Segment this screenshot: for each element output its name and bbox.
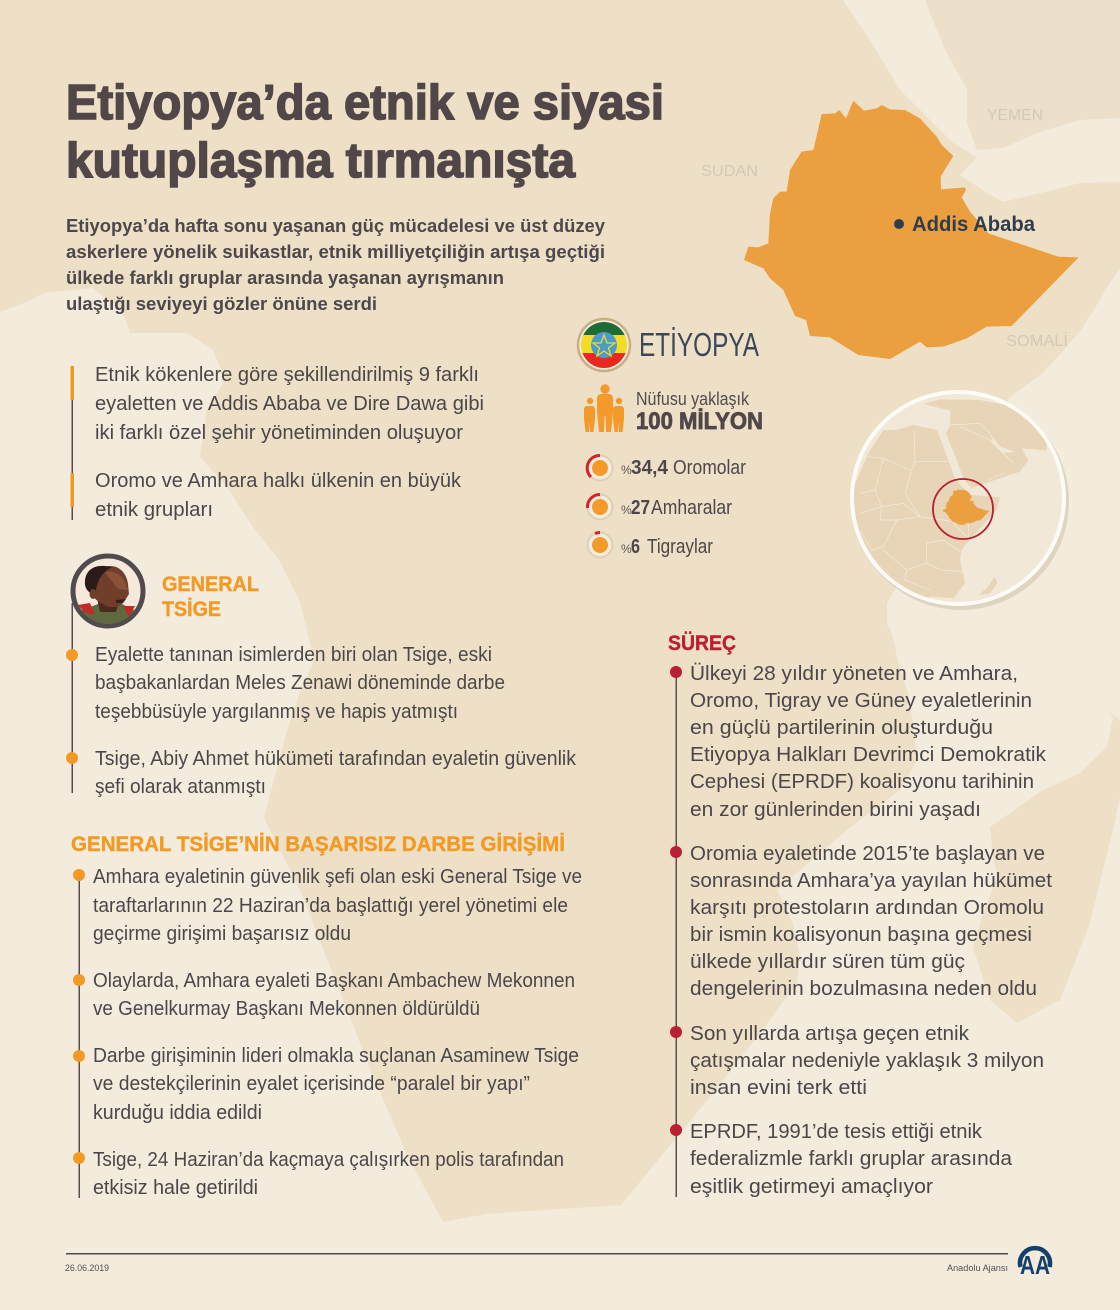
intro text: Etiyopya’da hafta sonu yaşanan güç mücadelesi ve üst düzey [66, 216, 605, 236]
panel: failed coup: GENERAL TSİGE’NİN BAŞARISIZ DARBE GİRİŞİMİ [71, 833, 565, 856]
text block: displacement: insan evini terk etti [690, 1077, 867, 1099]
text block: administrative structure: eyaletten ve Addis Ababa ve Dire Dawa gibi [95, 393, 484, 415]
country labels: SUDAN [701, 163, 758, 180]
text block: appointment: Tsige, Abiy Ahmet hükümeti tarafından eyaletin güvenlik [95, 748, 577, 770]
text block: neutralized [73, 1149, 564, 1199]
text block: largest groups [95, 470, 462, 521]
title [66, 76, 664, 188]
population: Nüfusu yaklaşık [636, 389, 750, 409]
text block: coup attempt [73, 866, 582, 945]
text block: Oromia protests: ülkede yıllardır süren tüm güç [690, 951, 965, 973]
text block: administrative structure: iki farklı özel şehir yönetiminden oluşuyor [95, 422, 463, 444]
country labels [701, 107, 1068, 350]
ethnic group: Amharalar: % [621, 503, 632, 517]
heading [162, 573, 259, 621]
locator globe map [840, 390, 1069, 620]
intro text: askerlere yönelik suikastlar, etnik milliyetçiliğin artışa geçtiği [66, 242, 605, 262]
text block: displacement: çatışmalar nedeniyle yaklaşık 3 milyon [690, 1050, 1044, 1072]
population [584, 384, 763, 435]
text block: Oromia protests: bir ismin koalisyonun başına geçmesi [690, 924, 1032, 946]
text block: biography [66, 644, 505, 723]
Ethiopia shape [744, 101, 1079, 359]
text block: killed officials [73, 970, 575, 1020]
text block: appointment: şefi olarak atanmıştı [95, 776, 266, 798]
intro text: ulaştığı seviyeyi gözler önüne serdi [66, 294, 377, 314]
text block: parallel structure: Darbe girişiminin lideri olmakla suçlanan Asaminew Tsige [93, 1045, 579, 1067]
text block: Oromia protests: karşıtı protestoların ardından Oromolu [690, 897, 1044, 919]
intro text [66, 216, 605, 314]
text block: EPRDF crisis: Cephesi (EPRDF) koalisyonu tarihinin [690, 771, 1034, 793]
icon: Anadolu Agency logo: AA [1020, 1250, 1050, 1280]
intro text: ülkede farklı gruplar arasında yaşanan ayrışmanın [66, 268, 504, 288]
heading: GENERAL [162, 573, 259, 596]
text block: parallel structure: ve destekçilerinin eyalet içerisinde “paralel bir yapı” [93, 1073, 530, 1095]
text block: EPRDF crisis: Oromo, Tigray ve Güney eyaletlerinin [690, 690, 1032, 712]
capital marker: Addis Ababa [912, 213, 1035, 236]
text block: largest groups: Oromo ve Amhara halkı ülkenin en büyük [95, 470, 462, 492]
title: Etiyopya’da etnik ve siyasi [66, 76, 664, 130]
text block: Oromia protests: dengelerinin bozulmasına neden oldu [690, 978, 1037, 1000]
title: kutuplaşma tırmanışta [66, 134, 576, 188]
text block: EPRDF crisis: Etiyopya Halkları Devrimci Demokratik [690, 744, 1047, 766]
text block: appointment [66, 748, 577, 798]
text block: neutralized: Tsige, 24 Haziran’da kaçmaya çalışırken polis tarafından [93, 1149, 564, 1171]
country heading [578, 319, 759, 371]
text block: federalism: federalizmle farklı gruplar arasında [690, 1148, 1013, 1170]
text block: displacement: Son yıllarda artışa geçen etnik [690, 1023, 970, 1045]
text block: coup attempt: geçirme girişimi başarısız oldu [93, 923, 351, 945]
text block: largest groups: etnik grupları [95, 499, 213, 521]
icon: people [584, 384, 624, 432]
footer [65, 1248, 1050, 1280]
ethnic group: Oromolar: 34,4 [631, 457, 669, 479]
text block: EPRDF crisis [670, 663, 1047, 821]
text block: killed officials: Olaylarda, Amhara eyaleti Başkanı Ambachew Mekonnen [93, 970, 575, 992]
panel: General Tsige [66, 556, 577, 798]
panel: process: SÜREÇ [668, 632, 736, 655]
country labels: YEMEN [987, 107, 1043, 124]
panel: process [668, 632, 1052, 1198]
text block: federalism: eşitlik getirmeyi amaçlıyor [690, 1176, 933, 1198]
text block: biography: teşebbüsüyle yargılanmış ve hapis yatmıştı [95, 701, 458, 723]
text block: coup attempt: Amhara eyaletinin güvenlik şefi olan eski General Tsige ve [93, 866, 582, 888]
ethnic group: Oromolar: Oromolar [673, 457, 746, 479]
text block: Oromia protests [670, 843, 1052, 1000]
ethnic group: Amharalar: Amharalar [651, 497, 732, 519]
heading: TSİGE [162, 598, 221, 621]
text block: coup attempt: taraftarlarının 22 Haziran’da başlattığı yerel yönetimi ele [93, 895, 568, 917]
portrait [72, 556, 144, 630]
country heading: ETİYOPYA [639, 326, 759, 363]
text block: administrative structure: Etnik kökenlere göre şekillendirilmiş 9 farklı [95, 364, 479, 386]
country labels: SOMALİ [1006, 331, 1068, 350]
text block: federalism: EPRDF, 1991’de tesis ettiği etnik [690, 1121, 983, 1143]
footer: Anadolu Ajansı [947, 1263, 1008, 1274]
ethnic group: Tigraylar: 6 [631, 536, 640, 558]
text block: displacement [670, 1023, 1044, 1099]
text block: administrative structure [95, 364, 484, 444]
text block: parallel structure: kurduğu iddia edildi [93, 1102, 262, 1124]
text block: Oromia protests: Oromia eyaletinde 2015’te başlayan ve [690, 843, 1045, 865]
ethnic group: Tigraylar: % [621, 542, 632, 556]
text block: biography: başbakanlardan Meles Zenawi döneminde darbe [95, 672, 505, 694]
text block: Oromia protests: sonrasında Amhara’ya yayılan hükümet [690, 870, 1052, 892]
ethnic group: Amharalar [587, 494, 732, 520]
text block: biography: Eyalette tanınan isimlerden biri olan Tsige, eski [95, 644, 492, 666]
text block: EPRDF crisis: Ülkeyi 28 yıldır yöneten ve Amhara, [690, 663, 1018, 685]
ethnic group: Tigraylar [588, 532, 713, 558]
ethnic group: Tigraylar: Tigraylar [647, 536, 713, 558]
panel: failed coup [71, 833, 582, 1199]
footer: 26.06.2019 [65, 1263, 109, 1274]
text block: parallel structure [73, 1045, 579, 1124]
text block: federalism [670, 1121, 1013, 1198]
text block: neutralized: etkisiz hale getirildi [93, 1177, 258, 1199]
population: 100 MİLYON [636, 408, 763, 435]
text block: killed officials: ve Genelkurmay Başkanı Mekonnen öldürüldü [93, 998, 480, 1020]
panel: overview list [70, 364, 484, 521]
map: Ethiopia [701, 101, 1079, 359]
icon: flag [578, 319, 630, 371]
ethnic group: Oromolar: % [621, 463, 632, 477]
text block: EPRDF crisis: en zor günlerinden birini yaşadı [690, 799, 981, 821]
ethnic group: Amharalar: 27 [631, 497, 650, 519]
ethnic group: Oromolar [587, 455, 746, 480]
text block: EPRDF crisis: en güçlü partilerinin oluşturduğu [690, 717, 993, 739]
